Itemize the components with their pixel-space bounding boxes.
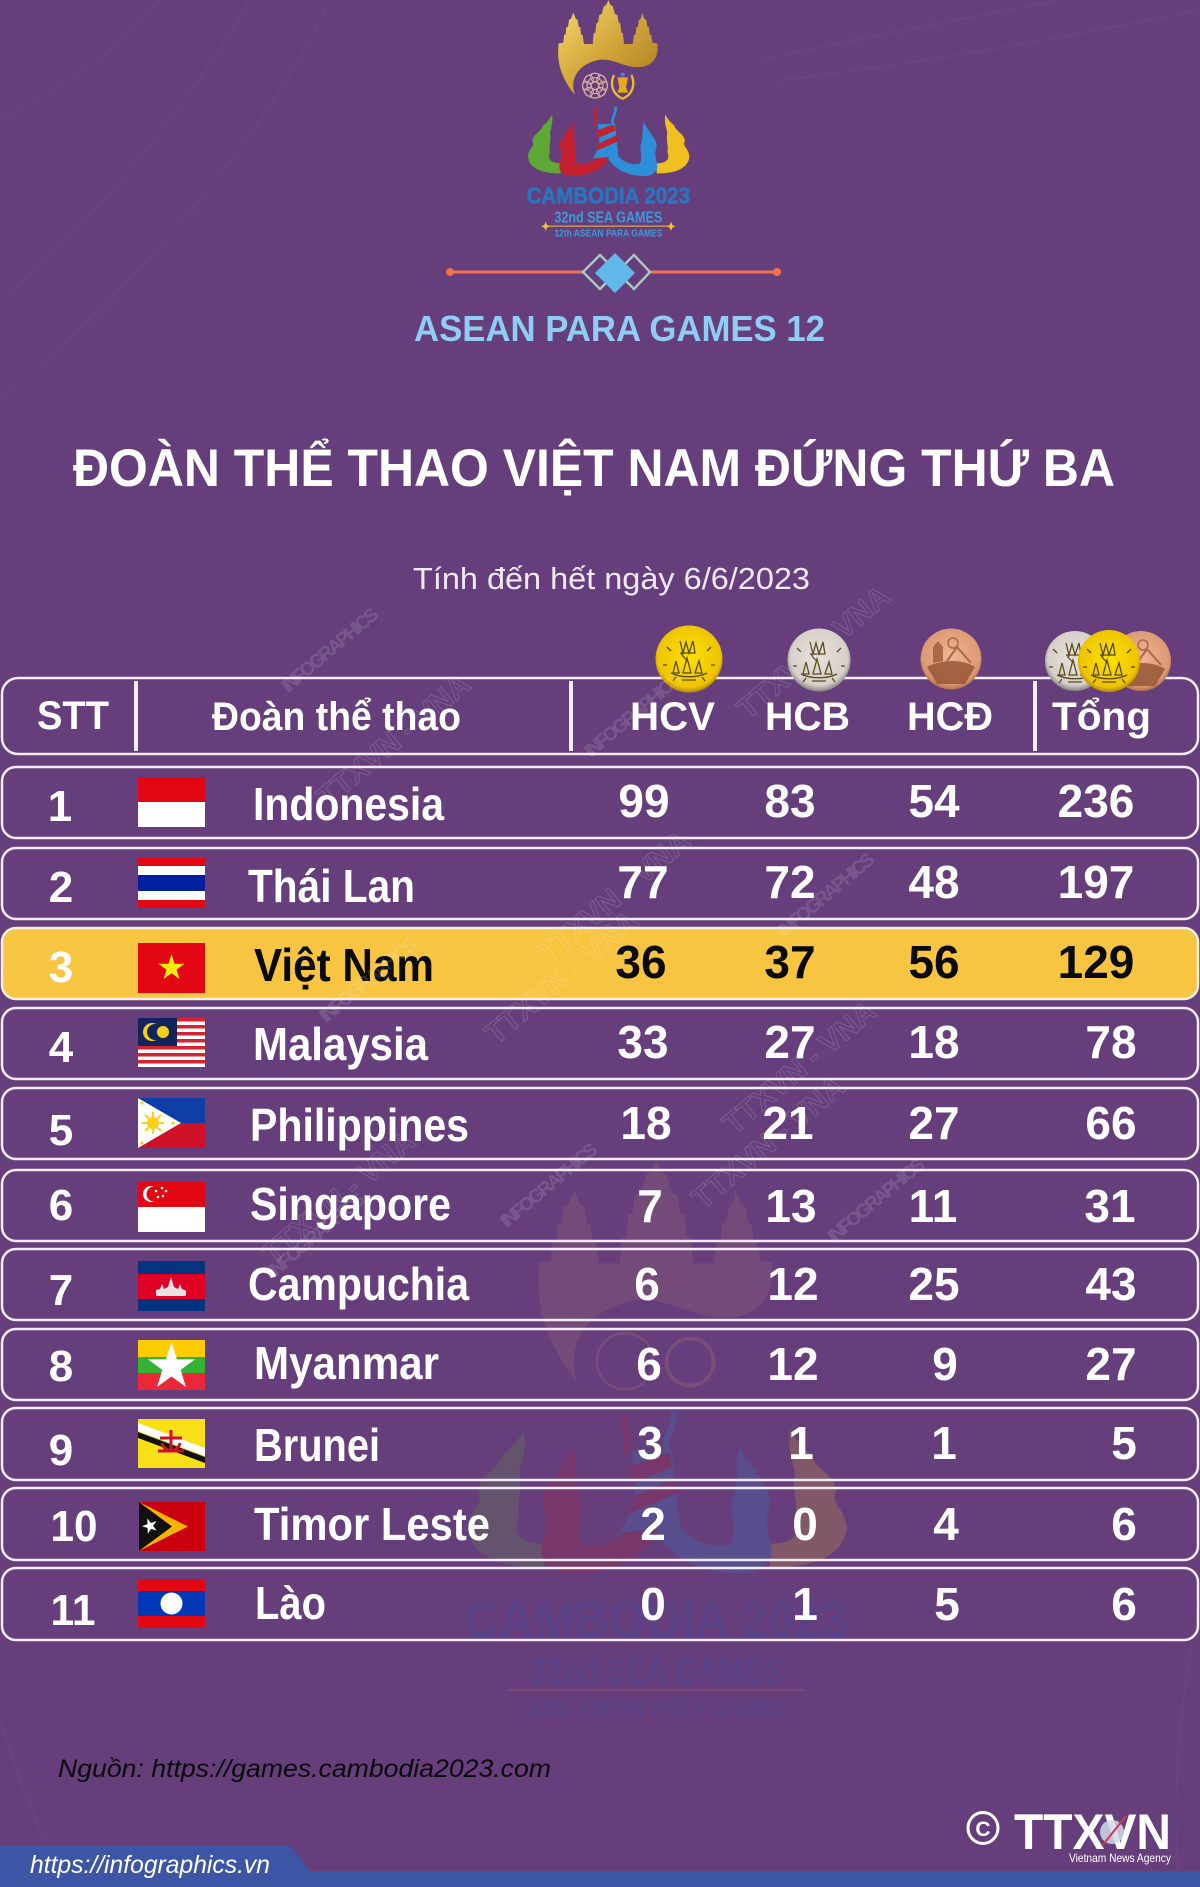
flag: Laos: [138, 1579, 205, 1628]
row 4: Malaysia: 27: [764, 1016, 816, 1068]
row 8: Myanmar: 6: [636, 1338, 662, 1390]
row 3: Việt Nam highlighted: 56: [908, 936, 960, 988]
website url: https://infographics.vn: [30, 1851, 270, 1879]
faded logo watermark: 12th ASEAN PARA GAMES: [530, 1695, 783, 1721]
row 11: Lào: 5: [934, 1578, 960, 1630]
event heading: ASEAN PARA GAMES 12: [414, 308, 825, 349]
faded logo watermark: 32nd SEA GAMES: [530, 1650, 783, 1691]
source note: Nguồn: https://games.cambodia2023.com: [58, 1755, 551, 1783]
faded logo watermark: [465, 1160, 848, 1721]
flag: Timor Leste: [139, 1502, 205, 1551]
row 8: Myanmar: 27: [1085, 1338, 1137, 1390]
row 3: Việt Nam highlighted: [2, 928, 1198, 999]
row 6: Singapore: Singapore: [250, 1178, 451, 1230]
flag: Singapore: [138, 1182, 205, 1232]
row 7: Campuchia: 25: [908, 1258, 960, 1310]
row 2: Thái Lan: 48: [908, 856, 960, 908]
flag: Vietnam: [138, 943, 205, 993]
table header: HCB: [765, 695, 850, 739]
outlined watermarks: TTXVN - VNA: [686, 1070, 852, 1216]
row 6: Singapore: 31: [1084, 1180, 1136, 1232]
row 4: Malaysia: 78: [1085, 1016, 1137, 1068]
event logo: [527, 0, 690, 240]
row 6: Singapore: 11: [909, 1180, 957, 1232]
row 2: Thái Lan: 72: [764, 856, 816, 908]
row 11: Lào: 11: [50, 1586, 96, 1635]
row 10: Timor Leste: 6: [1111, 1498, 1137, 1550]
row 9: Brunei: Brunei: [254, 1419, 380, 1471]
row 11: Lào: 6: [1111, 1578, 1137, 1630]
logo text: 32nd SEA Games: 32nd SEA GAMES: [554, 210, 662, 227]
copyright symbol: C: [975, 1818, 991, 1841]
watermarks: [264, 604, 929, 1282]
outlined watermarks: TTXVN - VNA: [731, 580, 897, 726]
watermarks: INFOGRAPHICS: [278, 604, 383, 697]
decorative divider with diamonds: [446, 253, 781, 293]
logo text: Cambodia 2023: CAMBODIA 2023: [527, 182, 690, 208]
logo: TTXVN: TTXVN: [1014, 1804, 1171, 1860]
row 3: Việt Nam highlighted: 129: [1058, 936, 1134, 988]
icon: bronze medal: [920, 628, 982, 690]
table header: Đoàn thể thao: [212, 695, 461, 739]
row 2: Thái Lan: [2, 848, 1198, 919]
outlined watermarks: TTXVN - VNA: [311, 668, 477, 814]
flag: Philippines: [138, 1098, 205, 1148]
row 6: Singapore: 7: [637, 1180, 663, 1232]
watermarks: INFOGRAPHICS: [581, 669, 686, 762]
row 4: Malaysia: 33: [617, 1016, 669, 1068]
table header: [2, 678, 1198, 754]
icon: three medals for total: [1045, 630, 1171, 692]
row 1: Indonesia: 99: [618, 775, 670, 827]
row 6: Singapore: 13: [765, 1180, 817, 1232]
icon: lotus emblem: [582, 73, 608, 98]
logo text: 12th ASEAN Para Games: 12th ASEAN PARA GAMES: [554, 229, 662, 240]
row 5: Philippines: 5: [49, 1106, 73, 1155]
row 7: Campuchia: Campuchia: [248, 1258, 469, 1310]
row 11: Lào: 0: [640, 1578, 666, 1630]
row 9: Brunei: 3: [637, 1417, 663, 1469]
table header: Tổng: [1052, 695, 1151, 739]
row 7: Campuchia: [2, 1249, 1198, 1320]
row 9: Brunei: [2, 1408, 1198, 1480]
row 4: Malaysia: 18: [908, 1016, 960, 1068]
flag: Indonesia: [138, 777, 205, 827]
row 11: Lào: Lào: [255, 1577, 326, 1629]
row 2: Thái Lan: Thái Lan: [248, 860, 415, 912]
row 7: Campuchia: 6: [634, 1258, 660, 1310]
row 7: Campuchia: 43: [1085, 1258, 1137, 1310]
row 11: Lào: [2, 1568, 1198, 1640]
row 10: Timor Leste: 4: [933, 1498, 959, 1550]
table header: HCV: [630, 695, 715, 739]
outlined watermarks: [256, 580, 897, 1271]
table header: STT: [37, 694, 109, 738]
watermarks: INFOGRAPHICS: [264, 1189, 369, 1282]
table header: HCĐ: [907, 695, 993, 739]
row 5: Philippines: 66: [1085, 1097, 1137, 1149]
watermarks: INFOGRAPHICS: [774, 849, 879, 942]
watermarks: INFOGRAPHICS: [316, 934, 421, 1027]
row 10: Timor Leste: 10: [50, 1502, 98, 1551]
icon: gold crown: [558, 0, 658, 95]
row 2: Thái Lan: 197: [1058, 856, 1134, 908]
row 5: Philippines: 21: [762, 1097, 814, 1149]
row 3: Việt Nam highlighted: Việt Nam: [254, 939, 434, 991]
row 4: Malaysia: 4: [49, 1023, 74, 1072]
flag: Cambodia: [138, 1261, 205, 1311]
row 5: Philippines: 27: [908, 1097, 960, 1149]
flag: Myanmar: [138, 1340, 205, 1390]
date subtitle: Tính đến hết ngày 6/6/2023: [413, 561, 810, 596]
row 6: Singapore: 6: [49, 1181, 73, 1230]
row 9: Brunei: 1: [931, 1417, 957, 1469]
row 8: Myanmar: 8: [49, 1342, 73, 1391]
flag: Malaysia: [138, 1018, 205, 1067]
row 7: Campuchia: 12: [767, 1258, 819, 1310]
logo: TTXVN: Vietnam News Agency: [1069, 1851, 1171, 1865]
row 4: Malaysia: [2, 1008, 1198, 1079]
row 9: Brunei: 9: [49, 1426, 73, 1475]
row 8: Myanmar: Myanmar: [254, 1337, 439, 1389]
icon: asean emblem: [612, 73, 633, 99]
row 11: Lào: 1: [792, 1578, 818, 1630]
row 8: Myanmar: 9: [932, 1338, 958, 1390]
flag: Thailand: [138, 858, 205, 908]
row 1: Indonesia: 1: [48, 782, 72, 831]
row 3: Việt Nam highlighted: 3: [49, 943, 73, 992]
row 4: Malaysia: Malaysia: [253, 1018, 428, 1070]
outlined watermarks: TTXVN - VNA: [717, 995, 883, 1141]
row 8: Myanmar: [2, 1329, 1198, 1400]
row 9: Brunei: 1: [788, 1417, 814, 1469]
row 1: Indonesia: 83: [764, 775, 816, 827]
copyright symbol: [968, 1812, 998, 1844]
logo line with sparkles: [541, 222, 676, 231]
row 3: Việt Nam highlighted: 37: [764, 936, 816, 988]
row 3: Việt Nam highlighted: 36: [615, 936, 667, 988]
icon: gold medal: [656, 626, 722, 692]
row 1: Indonesia: Indonesia: [253, 778, 444, 830]
row 8: Myanmar: 12: [767, 1338, 819, 1390]
flag: Brunei: [138, 1419, 205, 1468]
icon: silver medal: [788, 628, 850, 692]
row 2: Thái Lan: 2: [49, 863, 73, 912]
row 10: Timor Leste: 0: [792, 1498, 818, 1550]
row 6: Singapore: [2, 1170, 1198, 1241]
row 2: Thái Lan: 77: [617, 856, 669, 908]
faded logo watermark: CAMBODIA 2023: [465, 1591, 848, 1650]
row 10: Timor Leste: Timor Leste: [254, 1498, 490, 1550]
row 5: Philippines: 18: [620, 1097, 672, 1149]
row 1: Indonesia: 236: [1058, 775, 1134, 827]
watermarks: INFOGRAPHICS: [497, 1139, 602, 1232]
row 5: Philippines: [2, 1088, 1198, 1159]
outlined watermarks: TTXVN - VNA: [479, 905, 645, 1051]
icon: naga serpents: [528, 107, 689, 176]
row 10: Timor Leste: [2, 1488, 1198, 1560]
title: ĐOÀN THỂ THAO VIỆT NAM ĐỨNG THỨ BA: [73, 437, 1115, 498]
footer band: [0, 1846, 1200, 1887]
row 1: Indonesia: [2, 767, 1198, 838]
row 9: Brunei: 5: [1111, 1417, 1137, 1469]
row 1: Indonesia: 54: [908, 775, 960, 827]
outlined watermarks: TTXVN - VNA: [531, 825, 697, 971]
row 10: Timor Leste: 2: [640, 1498, 666, 1550]
row 5: Philippines: Philippines: [250, 1099, 469, 1151]
row 7: Campuchia: 7: [49, 1266, 73, 1315]
watermarks: INFOGRAPHICS: [824, 1154, 929, 1247]
outlined watermarks: TTXVN - VNA: [256, 1125, 422, 1271]
